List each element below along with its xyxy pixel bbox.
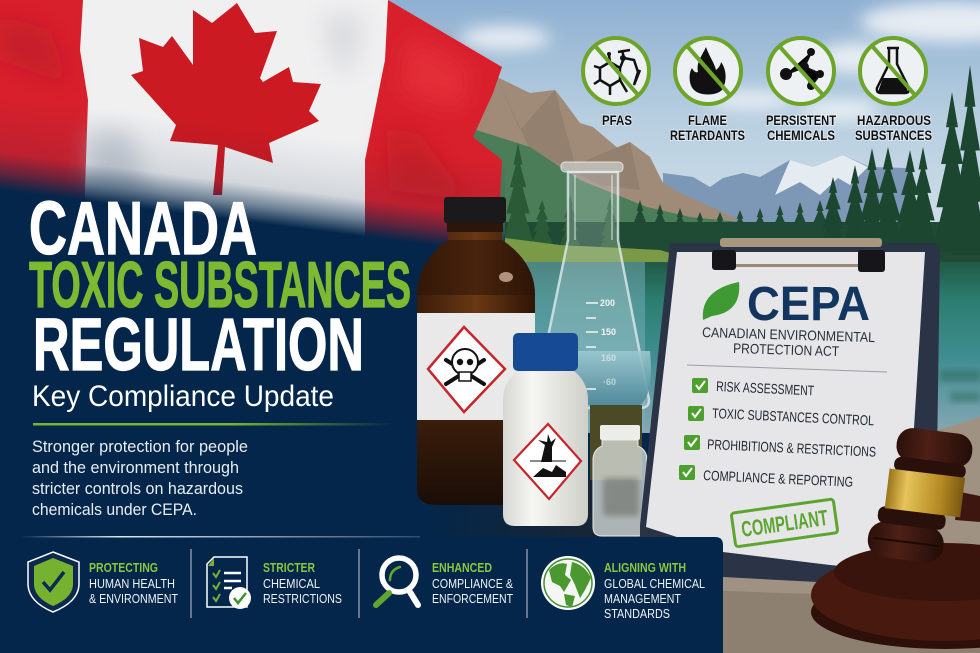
intro paragraph: and the environment through xyxy=(32,459,239,477)
icon labels: CHEMICALS xyxy=(767,127,835,143)
white plastic bottle xyxy=(503,333,588,526)
full act name: CANADIAN ENVIRONMENTAL xyxy=(702,324,875,345)
navy left panel xyxy=(0,80,640,540)
benefit: enforcement xyxy=(376,558,513,606)
icon: flask xyxy=(860,38,926,104)
icon: PFAS xyxy=(583,38,649,104)
subtitle: Key Compliance Update xyxy=(32,380,334,413)
hazard: environment xyxy=(530,434,566,477)
icon labels: SUBSTANCES xyxy=(855,127,932,143)
text: ENHANCED xyxy=(432,560,492,575)
icon labels xyxy=(602,112,932,143)
compliance checklist: PROHIBITIONS & RESTRICTIONS xyxy=(707,436,876,460)
icon: leaf xyxy=(703,282,739,320)
text: MANAGEMENT xyxy=(604,591,681,606)
small glass vial xyxy=(593,425,647,536)
text xyxy=(604,560,705,621)
title: Toxic Substances: TOXIC SUBSTANCES xyxy=(29,248,411,321)
glass flask: ·60 xyxy=(603,377,616,387)
icon labels: HAZARDOUS xyxy=(857,112,931,128)
intro paragraph xyxy=(32,438,248,519)
stone ledge xyxy=(700,417,980,653)
icon: molecule xyxy=(768,38,834,104)
background: mountain lake landscape xyxy=(380,0,980,653)
icon labels: FLAME xyxy=(688,112,727,128)
icon: globe xyxy=(541,556,595,610)
icon: magnifier xyxy=(376,558,418,605)
text xyxy=(263,560,342,606)
compliance checklist xyxy=(679,378,876,490)
text xyxy=(432,560,513,606)
text xyxy=(89,560,178,606)
text: GLOBAL CHEMICAL xyxy=(604,576,705,591)
benefit: protecting xyxy=(28,552,178,612)
canadian flag xyxy=(0,0,502,250)
full act name: PROTECTION ACT xyxy=(733,340,840,359)
text: PROTECTING xyxy=(89,560,158,575)
icon labels: RETARDANTS xyxy=(670,127,745,143)
CEPA logo text: CEPA xyxy=(747,278,870,331)
title: Canada: CANADA xyxy=(29,186,257,270)
compliance checklist: TOXIC SUBSTANCES CONTROL xyxy=(712,405,875,428)
text: STRICTER xyxy=(263,560,315,575)
text: HUMAN HEALTH xyxy=(89,576,175,591)
glass flask: 200 xyxy=(600,298,615,308)
maple leaf xyxy=(131,3,321,195)
compliant stamp: COMPLIANT xyxy=(740,505,830,542)
text: & ENVIRONMENT xyxy=(89,591,178,606)
glass flask: 160 xyxy=(601,353,616,363)
compliance checklist: RISK ASSESSMENT xyxy=(716,378,815,398)
gavel xyxy=(811,424,980,649)
benefit: global alignment xyxy=(541,556,705,621)
benefit: restrictions xyxy=(207,557,342,609)
glass flask xyxy=(534,162,651,480)
text: RESTRICTIONS xyxy=(263,591,342,606)
icon: flame xyxy=(675,38,741,104)
text: STANDARDS xyxy=(604,606,670,621)
head xyxy=(866,424,974,567)
text: CHEMICAL xyxy=(263,576,320,591)
compliance checklist: COMPLIANCE & REPORTING xyxy=(703,467,853,490)
compliant stamp xyxy=(731,499,838,547)
text: ALIGNING WITH xyxy=(604,560,686,575)
clipboard xyxy=(640,238,940,600)
intro paragraph: stricter controls on hazardous xyxy=(32,480,243,498)
prohibited icon row xyxy=(583,38,932,143)
icon labels: PERSISTENT xyxy=(766,112,836,128)
amber poison bottle xyxy=(417,197,535,505)
clip xyxy=(712,238,885,272)
icon labels: PFAS xyxy=(602,112,632,128)
title: Regulation: REGULATION xyxy=(33,303,364,386)
bottom benefits panel xyxy=(0,536,723,653)
full act name xyxy=(702,324,875,359)
handle xyxy=(955,492,980,522)
intro paragraph: Stronger protection for people xyxy=(32,438,248,456)
intro paragraph: chemicals under CEPA. xyxy=(32,501,197,519)
hazard: skull and crossbones xyxy=(446,349,484,384)
text: ENFORCEMENT xyxy=(432,591,513,606)
icon: shield xyxy=(28,552,79,612)
icon: document checklist xyxy=(207,557,251,609)
glass flask: 150 xyxy=(601,327,616,337)
text: COMPLIANCE & xyxy=(432,576,513,591)
